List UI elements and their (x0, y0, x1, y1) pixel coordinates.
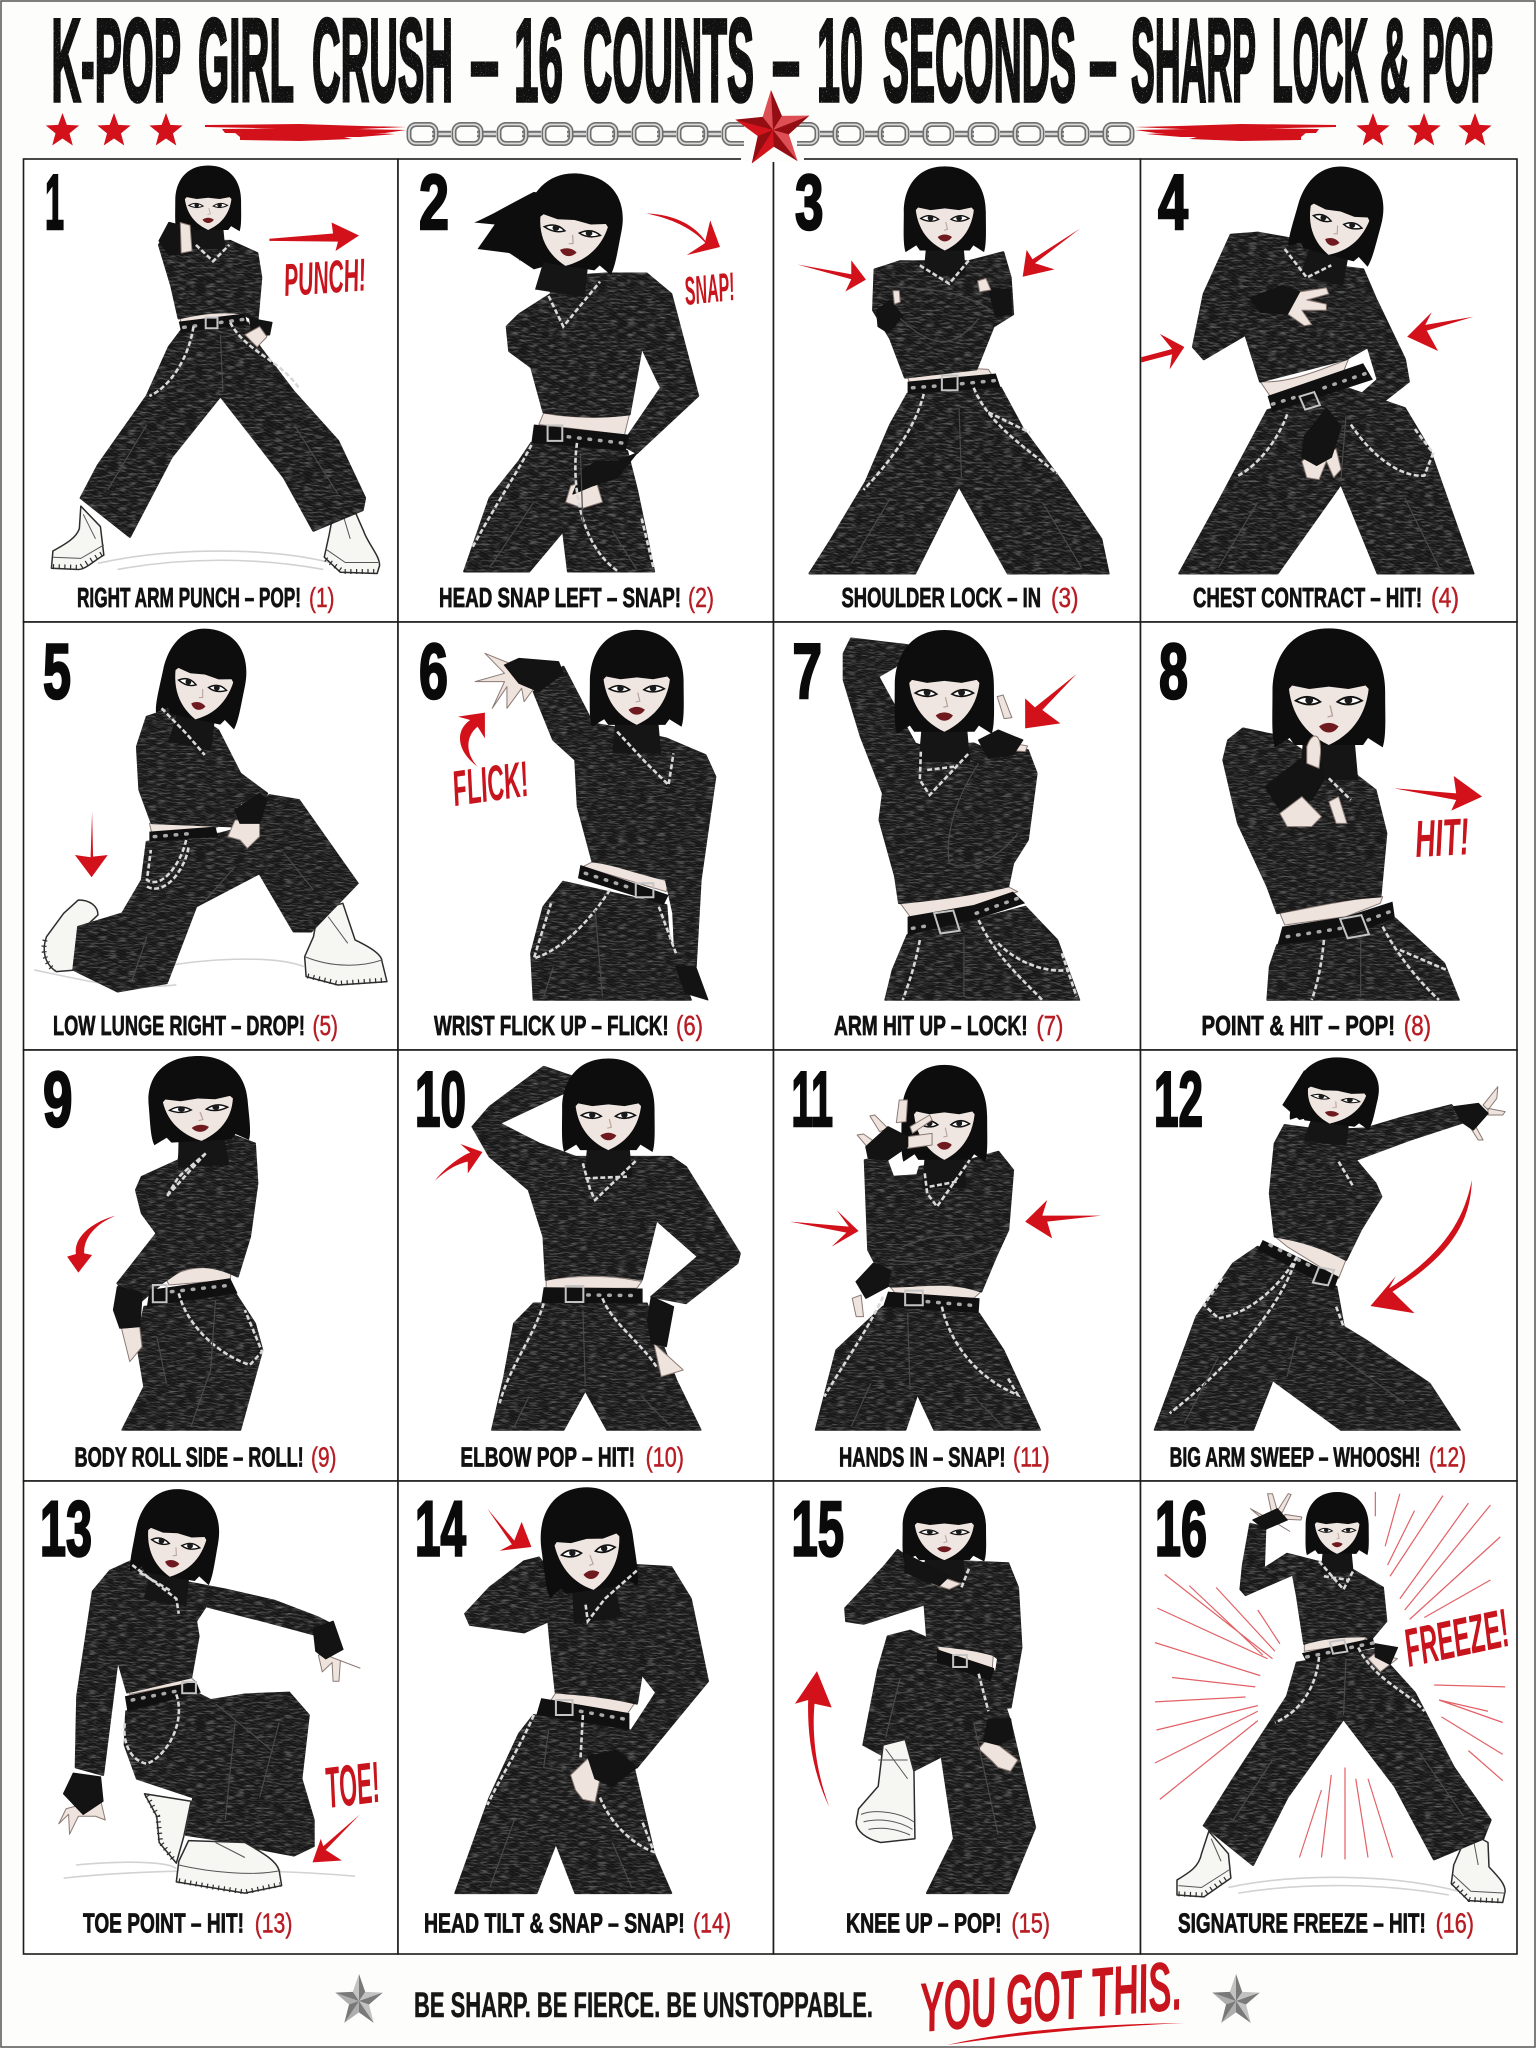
count number 4: 4 (1158, 158, 1188, 246)
panel: count 2: SNAP! (682, 265, 737, 314)
header ornament: left stars (46, 113, 183, 146)
caption 16: SIGNATURE FREEZE – HIT! (1178, 1908, 1426, 1938)
caption 13: TOE POINT – HIT! (83, 1908, 244, 1938)
caption 5: LOW LUNGE RIGHT – DROP! (53, 1010, 305, 1041)
panel: count 12 (1140, 1050, 1517, 1481)
caption 15: KNEE UP – POP! (846, 1908, 1002, 1938)
caption 10: ELBOW POP – HIT! (460, 1442, 635, 1472)
figure: toe point (59, 1483, 360, 1893)
arrow: shoulder in left (797, 260, 866, 291)
count number 8: 8 (1159, 627, 1188, 715)
count number 2: 2 (419, 158, 449, 246)
icon: silver star right (1212, 1974, 1260, 2023)
count number 3: 3 (795, 158, 824, 246)
panel: count 6: FLICK! (449, 751, 532, 817)
figure: elbow pop (473, 1058, 740, 1430)
count number 11: 11 (792, 1055, 833, 1143)
caption 2: HEAD SNAP LEFT – SNAP! (439, 582, 681, 613)
caption 13: (13) (255, 1908, 292, 1938)
header ornament: right brush stripes (1135, 124, 1336, 141)
header ornament: left chain (406, 121, 744, 147)
caption 16: (16) (1436, 1908, 1474, 1938)
header ornament: right chain (797, 121, 1135, 147)
panel: count 9 (24, 1050, 398, 1481)
count number 16: 16 (1155, 1484, 1207, 1572)
panel: count 1 (24, 158, 398, 622)
footer slogan (335, 1946, 1260, 2047)
caption 3: (3) (1051, 582, 1078, 613)
panel: count 6 (398, 622, 774, 1050)
arrow: hands in left (790, 1210, 859, 1247)
caption 1: (1) (309, 582, 334, 613)
panel: count 13 (24, 1481, 398, 1954)
arrow: flick up (458, 713, 485, 767)
panel: count 4 (1140, 157, 1517, 622)
caption 15: (15) (1011, 1908, 1050, 1938)
icon: big red star (734, 88, 812, 164)
figure: right arm punch (51, 165, 380, 574)
caption 7: (7) (1036, 1010, 1063, 1041)
figure: shoulder lock (810, 166, 1108, 574)
count number 7: 7 (792, 627, 822, 715)
arrow: shoulder in right (1023, 229, 1080, 277)
brush underline (947, 2023, 1184, 2045)
panel: count 2 (398, 158, 774, 622)
count number 12: 12 (1154, 1055, 1203, 1143)
count number 5: 5 (43, 627, 71, 715)
impact burst lines (1155, 1492, 1505, 1859)
arrow: drop down (75, 812, 108, 877)
figure: head snap left (464, 167, 698, 571)
arrow: arm lock (1025, 674, 1077, 728)
panel: count 3 (774, 158, 1140, 622)
panel: count 16 (1140, 1481, 1517, 1954)
figure: head tilt and snap (456, 1481, 708, 1893)
caption 4: (4) (1431, 582, 1459, 613)
arrow: roll down (67, 1216, 116, 1273)
panel: count 14 (398, 1481, 774, 1954)
caption 4: CHEST CONTRACT – HIT! (1193, 582, 1422, 613)
arrow: knee up (795, 1671, 832, 1807)
arrow: chest in right (1407, 312, 1473, 351)
figure: wrist flick up (475, 630, 715, 1000)
panel: count 1: 1 (45, 158, 64, 246)
arrow: elbow up (435, 1144, 482, 1181)
count number 9: 9 (43, 1055, 72, 1143)
arrow: hit right (1394, 776, 1482, 811)
count number 6: 6 (419, 627, 448, 715)
figure: arm hit up (844, 630, 1079, 1000)
panel: count 15 (774, 1481, 1140, 1954)
figure: body roll side (114, 1053, 262, 1430)
footer text: BE SHARP. BE FIERCE. BE UNSTOPPABLE. (414, 1986, 873, 2025)
callout: HIT!: HIT! (1414, 808, 1471, 869)
panel: count 8 (1140, 622, 1517, 1050)
panel: count 7 (774, 622, 1140, 1050)
caption 8: (8) (1404, 1010, 1431, 1041)
figure: hands in (816, 1065, 1040, 1430)
header ornament: right stars (1356, 113, 1492, 146)
figure: big arm sweep (1155, 1053, 1505, 1430)
figure: low lunge right (34, 621, 387, 992)
panel: count 10 (398, 1050, 774, 1481)
caption 8: POINT & HIT – POP! (1202, 1010, 1395, 1041)
arrow: arm sweep (1370, 1180, 1472, 1313)
caption 9: (9) (311, 1442, 336, 1472)
panel: count 13: TOE! (322, 1750, 383, 1821)
arrow: hands in right (1025, 1200, 1101, 1238)
script: you got this: YOU GOT THIS. (917, 1946, 1184, 2047)
caption 10: (10) (646, 1442, 684, 1472)
arrow: head tilt (487, 1509, 531, 1551)
caption 6: (6) (676, 1010, 703, 1041)
figure: chest contract (1179, 157, 1473, 574)
count number 10: 10 (415, 1055, 466, 1143)
caption 14: (14) (693, 1908, 731, 1938)
count number 14: 14 (415, 1484, 466, 1572)
caption 12: (12) (1429, 1442, 1466, 1472)
caption 3: SHOULDER LOCK – IN (842, 582, 1041, 613)
count number 13: 13 (40, 1484, 92, 1572)
figure: point and hit (1224, 628, 1459, 1000)
panel: count 1: PUNCH! (282, 248, 367, 306)
caption 14: HEAD TILT & SNAP – SNAP! (424, 1908, 685, 1938)
panel: count 11 (774, 1050, 1140, 1481)
count number 15: 15 (792, 1484, 844, 1572)
caption 5: (5) (312, 1010, 338, 1041)
icon: silver star left (335, 1974, 383, 2023)
arrow: snap right (647, 213, 720, 255)
arrow: punch right (269, 222, 359, 251)
title (51, 0, 1493, 127)
caption 6: WRIST FLICK UP – FLICK! (434, 1010, 669, 1041)
panel: count 5 (24, 621, 398, 1050)
caption 2: (2) (688, 582, 714, 613)
caption 7: ARM HIT UP – LOCK! (834, 1010, 1028, 1041)
arrow: chest in left (1141, 334, 1184, 369)
arrow: toe down (312, 1814, 360, 1862)
caption 1: RIGHT ARM PUNCH – POP! (77, 582, 301, 613)
figure: knee up (845, 1487, 1035, 1893)
caption 11: HANDS IN – SNAP! (839, 1442, 1006, 1472)
header ornament: left brush stripes (205, 124, 406, 141)
caption 9: BODY ROLL SIDE – ROLL! (74, 1442, 304, 1472)
figure: signature freeze (1177, 1492, 1505, 1902)
caption 11: (11) (1013, 1442, 1050, 1472)
